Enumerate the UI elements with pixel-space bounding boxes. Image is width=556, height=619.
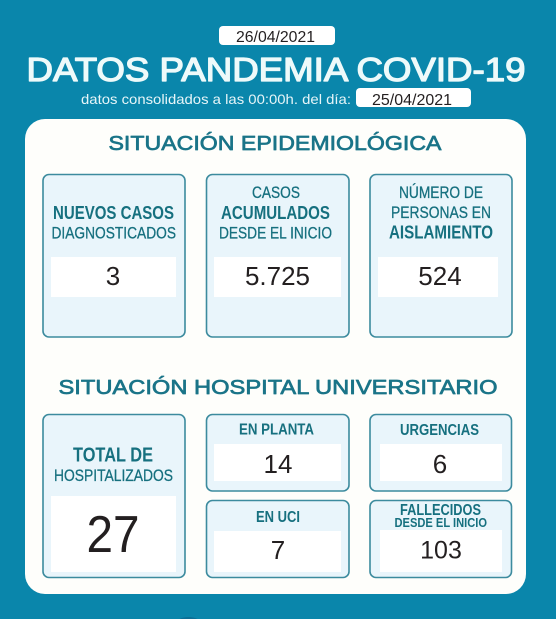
card: total de hospitalizados: TOTAL DE xyxy=(73,444,153,466)
card: fallecidos: FALLECIDOS xyxy=(400,502,481,519)
card: fallecidos: 103 xyxy=(420,536,462,564)
card: personas en aislamiento: 524 xyxy=(418,261,462,291)
card: personas en aislamiento: NÚMERO DE xyxy=(399,183,483,202)
card: casos acumulados: 5.725 xyxy=(245,261,310,291)
card: fallecidos xyxy=(370,500,512,578)
card: urgencias: 6 xyxy=(433,449,447,479)
card: en planta: EN PLANTA xyxy=(239,422,314,438)
card: en uci: 7 xyxy=(271,535,285,565)
card: en uci: EN UCI xyxy=(256,509,300,526)
card: personas en aislamiento: PERSONAS EN xyxy=(391,203,491,222)
card: personas en aislamiento xyxy=(370,174,512,337)
card: en planta xyxy=(206,414,349,491)
card: casos acumulados: ACUMULADOS xyxy=(221,203,330,223)
partial logo at bottom edge xyxy=(176,617,200,619)
subtitle with consolidated date: datos consolidados a las 00:00h. del día: xyxy=(81,91,351,107)
title: DATOS PANDEMIA COVID-19 xyxy=(26,51,526,88)
card: total de hospitalizados: 27 xyxy=(86,506,140,564)
card: casos acumulados xyxy=(206,174,349,337)
heading: situación epidemiológica: SITUACIÓN EPIDEMIOLÓGICA xyxy=(108,132,442,155)
card: urgencias: URGENCIAS xyxy=(400,422,479,439)
card: casos acumulados: DESDE EL INICIO xyxy=(219,224,332,242)
card: fallecidos: DESDE EL INICIO xyxy=(394,515,487,530)
panel: white content panel xyxy=(25,119,526,594)
subtitle with consolidated date xyxy=(81,88,471,109)
card: nuevos casos: 3 xyxy=(106,261,120,291)
card: nuevos casos xyxy=(43,174,185,337)
card: en uci xyxy=(206,500,349,578)
date badge: 26/04/2021 xyxy=(236,29,315,46)
card: total de hospitalizados xyxy=(43,414,185,578)
subtitle with consolidated date: 25/04/2021 xyxy=(372,92,452,109)
card: total de hospitalizados: HOSPITALIZADOS xyxy=(54,466,173,485)
card: urgencias xyxy=(370,414,512,491)
card: en planta: 14 xyxy=(264,449,292,479)
card: personas en aislamiento: AISLAMIENTO xyxy=(389,222,493,242)
date badge xyxy=(219,26,335,46)
heading: situación hospital universitario: SITUACIÓN HOSPITAL UNIVERSITARIO xyxy=(58,376,498,399)
card: nuevos casos: DIAGNOSTICADOS xyxy=(52,224,176,242)
card: nuevos casos: NUEVOS CASOS xyxy=(53,203,174,223)
card: casos acumulados: CASOS xyxy=(252,183,300,202)
